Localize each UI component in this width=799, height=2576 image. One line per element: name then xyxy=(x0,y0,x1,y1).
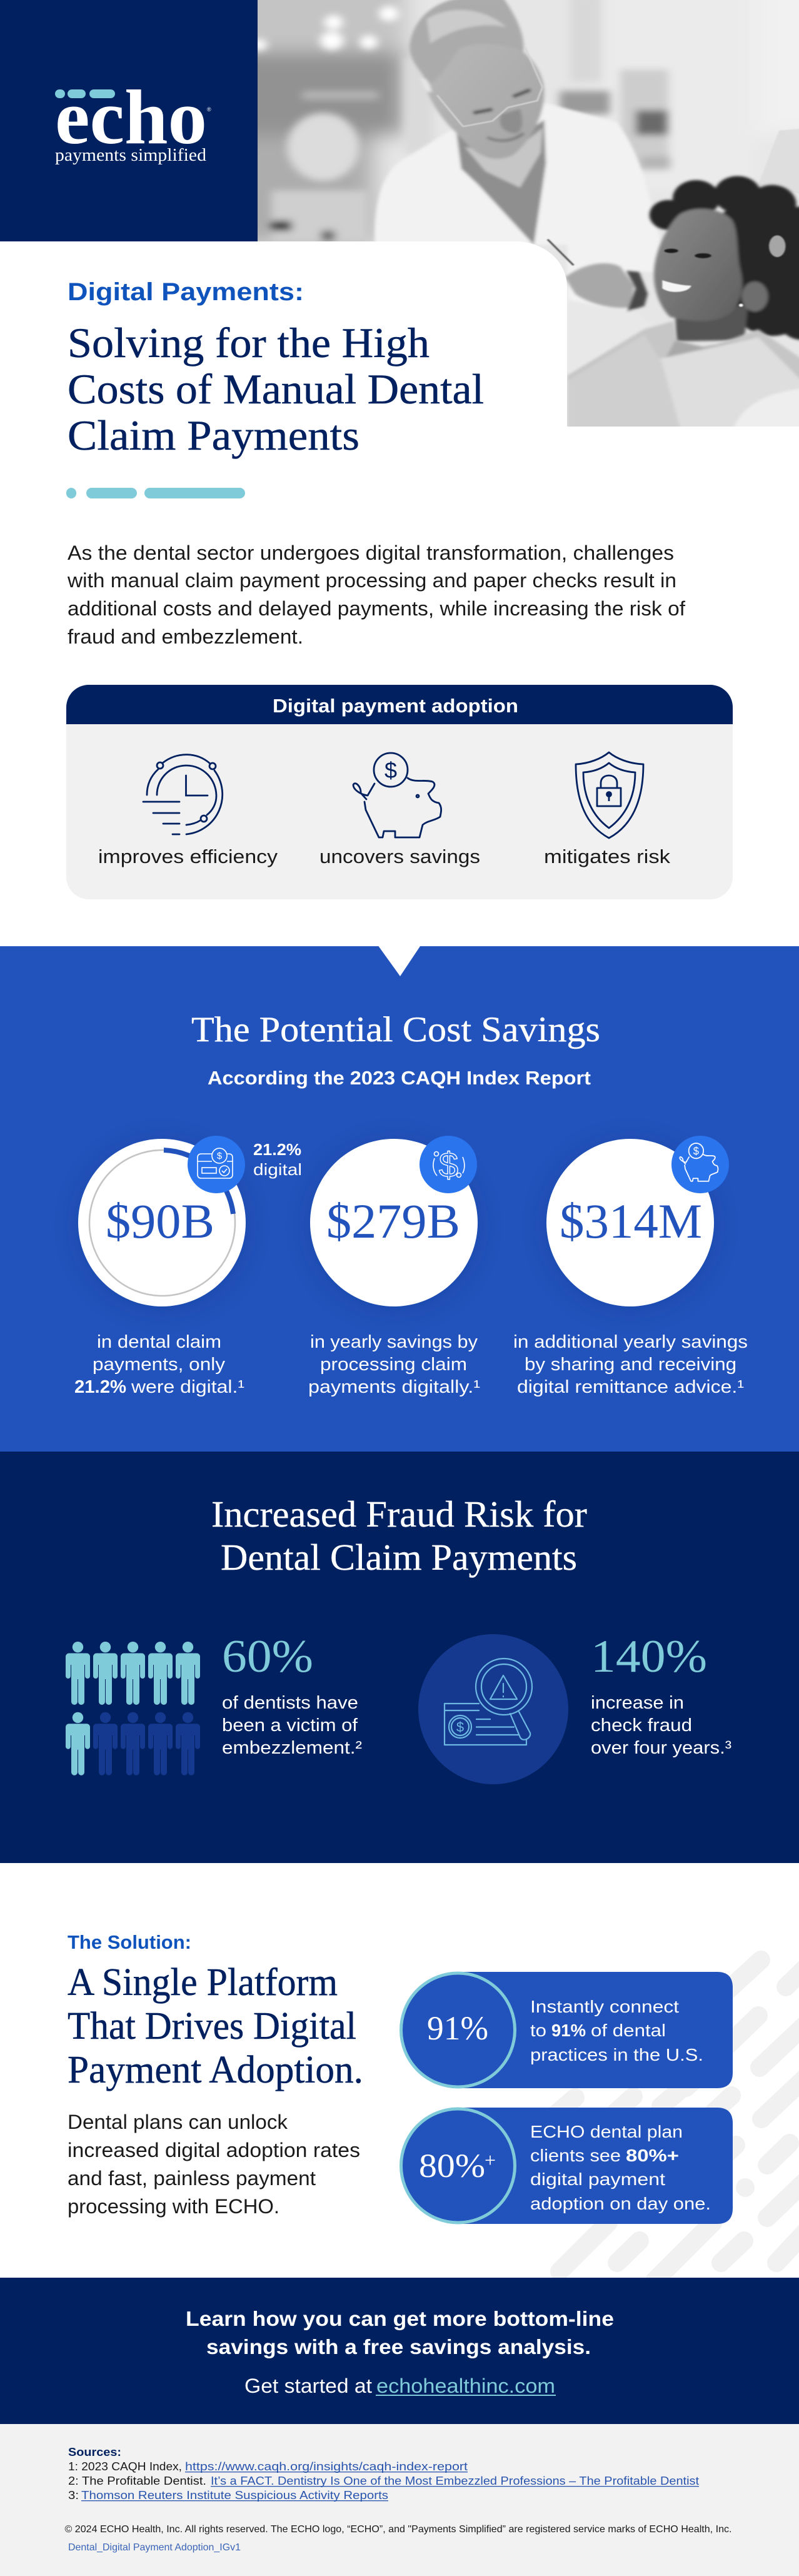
stat pill: 91%: of dental xyxy=(591,2021,666,2040)
call to action band xyxy=(0,2278,799,2424)
stat pill: 91% xyxy=(401,1972,733,2088)
icon: piggy badge xyxy=(671,1136,729,1193)
stat pill: 80%+ xyxy=(401,2108,733,2224)
section subheading: According the 2023 CAQH Index Report xyxy=(208,1067,591,1089)
footer: sources and legal: 1: 2023 CAQH Index, xyxy=(68,2460,182,2473)
notch arrow xyxy=(379,946,420,976)
stat text: embezzlement: embezzlement.² xyxy=(222,1738,362,1758)
caption xyxy=(308,1332,480,1397)
solution paragraph: processing with ECHO. xyxy=(68,2195,279,2218)
intro paragraph: fraud and embezzlement. xyxy=(68,625,303,648)
icon: payment card badge: $ xyxy=(217,1151,223,1161)
section heading: Dental Claim Payments xyxy=(221,1537,577,1578)
solution heading xyxy=(68,1961,363,2091)
caption: payments digitally.¹ xyxy=(308,1377,480,1397)
icon: dollar badge: $ xyxy=(439,1145,458,1184)
caption: in yearly savings by xyxy=(310,1332,478,1352)
call to action band: savings with a free savings analysis. xyxy=(206,2335,591,2358)
panel: digital payment adoption xyxy=(66,685,733,899)
icon: payment card badge xyxy=(188,1136,245,1193)
stat pill: 80%+: 80% xyxy=(419,2147,485,2185)
caption: were digital.¹ xyxy=(131,1377,244,1397)
panel: fraud risk xyxy=(0,1452,799,1863)
solution heading: A Single Platform xyxy=(68,1961,338,2004)
stat: 60%: 60% xyxy=(222,1631,313,1682)
icon: clock xyxy=(143,755,223,834)
footer: sources and legal: 3: xyxy=(68,2488,79,2502)
icon: piggy badge: $ xyxy=(693,1145,700,1158)
caption: digital remittance advice.¹ xyxy=(517,1377,744,1397)
section heading: Increased Fraud Risk for xyxy=(211,1493,587,1535)
icon labels: uncovers savings xyxy=(319,846,480,867)
title: Solving for the High xyxy=(68,319,430,366)
icon: dollar badge xyxy=(420,1136,477,1193)
icon labels xyxy=(98,846,671,867)
pictogram: 6 of 10 people xyxy=(66,1642,200,1775)
stat pill: 80%+: adoption on day one. xyxy=(530,2194,711,2213)
stat: $279B: $279B xyxy=(326,1194,460,1248)
logo: echo payments simplified: payments simplified xyxy=(55,146,206,165)
intro paragraph: As the dental sector undergoes digital transformation, challenges xyxy=(68,542,674,564)
label: 21.2% digital xyxy=(253,1140,302,1179)
stat pill: 91%: to xyxy=(530,2021,546,2040)
logo: echo payments simplified: echo xyxy=(55,74,207,160)
stat pill: 80%+: digital payment xyxy=(530,2169,665,2189)
section heading: The Potential Cost Savings xyxy=(191,1010,600,1049)
intro paragraph: with manual claim payment processing and paper checks result in xyxy=(67,569,676,592)
solution heading: That Drives Digital xyxy=(68,2005,356,2048)
footer: sources and legal: It’s a FACT. Dentistry Is One of the Most Embezzled Professions – The Profitable Dentist xyxy=(211,2474,699,2487)
footer: sources and legal: Dental_Digital Payment Adoption_IGv1 xyxy=(68,2542,241,2553)
stat text: check fraud: check fraud xyxy=(591,1715,692,1735)
section heading xyxy=(211,1493,587,1578)
icon labels: improves efficiency xyxy=(98,846,278,867)
footer: sources and legal: 2: The Profitable Dentist. xyxy=(68,2474,206,2487)
solution heading: Payment Adoption. xyxy=(68,2049,363,2091)
white title panel with rounded corner xyxy=(0,241,567,438)
stat text: embezzlement: been a victim of xyxy=(222,1715,358,1735)
stat: 140%: 140% xyxy=(591,1631,707,1682)
icon: check under magnifier: $ xyxy=(456,1719,464,1735)
stat: $314M: $314M xyxy=(560,1194,702,1248)
caption: 21.2% xyxy=(74,1377,126,1397)
eyebrow: Digital Payments: Digital Payments: xyxy=(68,278,304,306)
footer: sources and legal: Thomson Reuters Institute Suspicious Activity Reports xyxy=(81,2488,388,2502)
footer: sources and legal: Sources: xyxy=(68,2446,121,2458)
logo: echo payments simplified: ® xyxy=(207,106,211,113)
stat pill: 80%+: 80%+ xyxy=(626,2146,679,2165)
header photo: dentist and child xyxy=(258,0,799,427)
eyebrow: The Solution: The Solution: xyxy=(68,1931,191,1953)
pill divider xyxy=(66,488,245,498)
icon: piggy bank: $ xyxy=(384,757,397,783)
icon: piggy bank xyxy=(353,753,441,837)
stat text: check fraud: over four years.³ xyxy=(591,1738,731,1758)
icon: shield with lock xyxy=(576,752,643,838)
stat pill: 91%: practices in the U.S. xyxy=(530,2045,703,2064)
caption: payments, only xyxy=(93,1355,226,1375)
title: Costs of Manual Dental xyxy=(68,365,484,413)
title xyxy=(68,319,484,459)
call to action band: Learn how you can get more bottom-line xyxy=(186,2307,614,2330)
stat pill: 91%: 91% xyxy=(427,2009,488,2047)
header navy block xyxy=(0,0,258,241)
call to action band: echohealthinc.com xyxy=(376,2375,555,2397)
icon labels: mitigates risk xyxy=(544,846,671,867)
stat text: embezzlement: of dentists have xyxy=(222,1693,358,1713)
solution paragraph: Dental plans can unlock xyxy=(68,2111,288,2133)
intro paragraph xyxy=(67,542,685,648)
caption: in dental claim xyxy=(97,1332,221,1352)
caption: by sharing and receiving xyxy=(525,1355,736,1375)
caption: processing claim xyxy=(320,1355,467,1375)
stat pill: 91%: 91% xyxy=(551,2021,586,2040)
caption: in additional yearly savings xyxy=(513,1332,748,1352)
caption xyxy=(513,1332,748,1397)
footer: sources and legal: © 2024 ECHO Health, Inc. All rights reserved. The ECHO logo, “ECHO”, and "Payments Simplified” are registered service marks of ECHO Health, Inc. xyxy=(65,2524,731,2535)
stat: $90B xyxy=(74,1136,302,1397)
icon: check under magnifier xyxy=(418,1634,568,1784)
solution paragraph: and fast, painless payment xyxy=(68,2167,316,2190)
stat pill: 80%+: ECHO dental plan xyxy=(530,2122,683,2141)
stat pill: 91%: Instantly connect xyxy=(530,1997,679,2016)
stat pill: 80%+: clients see xyxy=(530,2146,621,2165)
stat text: check fraud: increase in xyxy=(591,1693,684,1713)
decorative stripes xyxy=(548,1960,799,2281)
title: Claim Payments xyxy=(68,412,359,459)
solution paragraph: increased digital adoption rates xyxy=(68,2139,360,2161)
stat text: check fraud xyxy=(591,1693,731,1758)
label: 21.2% digital: 21.2% xyxy=(253,1140,301,1159)
stat: $279B xyxy=(306,1136,481,1397)
call to action band: Get started at xyxy=(244,2375,372,2397)
intro paragraph: additional costs and delayed payments, while increasing the risk of xyxy=(68,597,685,620)
stat pill: 80%+: + xyxy=(485,2149,496,2171)
footer: sources and legal: https://www.caqh.org/insights/caqh-index-report xyxy=(185,2460,468,2473)
label: 21.2% digital: digital xyxy=(253,1160,302,1179)
stat: $90B: $90B xyxy=(106,1194,214,1248)
panel: digital payment adoption: Digital payment adoption xyxy=(273,695,518,717)
solution paragraph xyxy=(68,2111,360,2218)
caption xyxy=(74,1332,244,1397)
stat text: embezzlement xyxy=(222,1693,362,1758)
stat: $314M xyxy=(513,1136,748,1397)
footer: sources and legal xyxy=(0,2424,799,2576)
panel: potential cost savings xyxy=(0,946,799,1452)
